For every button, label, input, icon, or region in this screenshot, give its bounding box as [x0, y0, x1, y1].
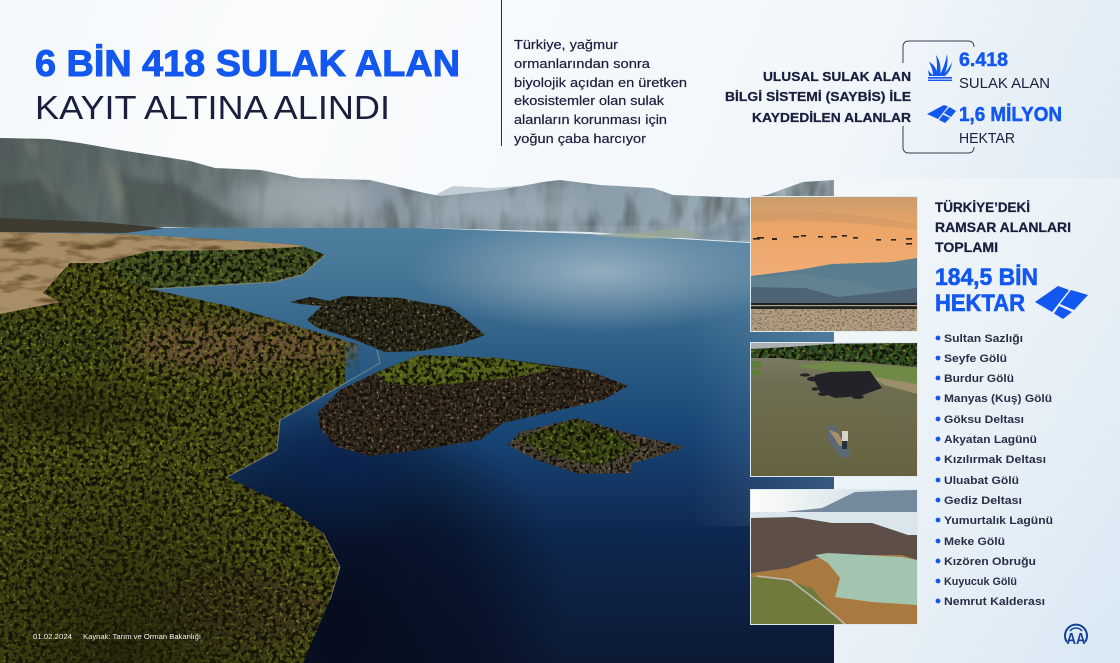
intro text block: ormanlarından sonra	[514, 56, 651, 71]
Ramsar heading: TÜRKİYE’DEKİ	[935, 200, 1030, 215]
mountain range	[0, 138, 834, 242]
stat: 6.418 wetlands	[959, 50, 1050, 92]
dark strip at foot of mountain	[0, 218, 165, 233]
list of Ramsar sites: Kızören Obruğu	[944, 556, 1036, 568]
logo: AA: AA	[1066, 631, 1086, 648]
SAYBIS heading: BİLGİ SİSTEMİ (SAYBİS) İLE	[725, 89, 911, 104]
logo: AA	[1065, 625, 1087, 648]
lake water	[0, 212, 834, 663]
SAYBIS heading: ULUSAL SULAK ALAN	[763, 69, 911, 84]
distant peaks	[437, 186, 545, 198]
intro text block: yoğun çaba harcıyor	[514, 131, 647, 146]
divider line	[501, 0, 502, 146]
list of Ramsar sites: Meke Gölü	[944, 536, 1005, 548]
photo 1 border	[750, 196, 918, 332]
stat: 1.6 million hectares	[959, 103, 1062, 147]
green peninsula	[103, 246, 328, 290]
intro text block	[514, 37, 687, 146]
intro text block: alanların korunması için	[514, 112, 667, 127]
list of Ramsar sites: Nemrut Kalderası	[944, 596, 1045, 608]
SAYBIS heading	[725, 69, 912, 125]
Ramsar heading	[935, 200, 1071, 255]
stat: 184.5 thousand hectares: 184,5 BİN	[935, 264, 1038, 291]
stat: 184.5 thousand hectares	[935, 264, 1038, 317]
tan plain	[0, 230, 330, 314]
island 3	[508, 418, 685, 474]
list of Ramsar sites: Akyatan Lagünü	[944, 434, 1037, 446]
photo 3 border	[750, 490, 918, 624]
island 3 tree cover	[518, 419, 640, 466]
Ramsar heading: RAMSAR ALANLARI	[935, 220, 1071, 235]
stat: 184.5 thousand hectares: HEKTAR	[935, 290, 1025, 317]
list of Ramsar sites: Uluabat Gölü	[944, 475, 1019, 487]
intro text block: ekosistemler olan sulak	[514, 93, 665, 108]
date and source: Kaynak: Tarım ve Orman Bakanlığı	[83, 634, 201, 641]
list of Ramsar sites: Kuyucuk Gölü	[944, 576, 1017, 588]
island 2	[318, 355, 628, 456]
date and source	[33, 634, 201, 641]
list of Ramsar sites: Burdur Gölü	[944, 373, 1014, 385]
far shore strip	[590, 228, 700, 239]
list of Ramsar sites: Göksu Deltası	[944, 414, 1024, 426]
list of Ramsar sites: Kızılırmak Deltası	[944, 454, 1046, 466]
stat: 1.6 million hectares: 1,6 MİLYON	[959, 103, 1062, 126]
mountain rock faces and mist	[1, 140, 750, 242]
list of Ramsar sites	[936, 333, 1053, 608]
title: 6 BİN 418 SULAK ALAN	[35, 43, 460, 84]
Ramsar heading: TOPLAMI	[935, 240, 998, 255]
title	[35, 43, 460, 126]
photo: cranes at sunset	[751, 197, 917, 331]
photo: crater lake from above	[751, 490, 917, 624]
list of Ramsar sites: Manyas (Kuş) Gölü	[944, 393, 1052, 405]
island 2 tree cover	[375, 355, 560, 386]
photo: water buffalo and boat	[751, 343, 917, 476]
icon: land parcels large	[1035, 286, 1088, 319]
icon: land parcels small	[927, 105, 956, 123]
intro text block: Türkiye, yağmur	[514, 37, 619, 52]
list of Ramsar sites: Sultan Sazlığı	[944, 333, 1023, 345]
SAYBIS heading: KAYDEDİLEN ALANLAR	[752, 110, 912, 125]
list of Ramsar sites: Gediz Deltası	[944, 495, 1022, 507]
right panel background	[834, 178, 1120, 663]
island 1	[290, 296, 485, 352]
list of Ramsar sites: Seyfe Gölü	[944, 353, 1007, 365]
stat: 1.6 million hectares: HEKTAR	[959, 130, 1015, 147]
stat: 6.418 wetlands: SULAK ALAN	[959, 75, 1050, 92]
title: KAYIT ALTINA ALINDI	[35, 89, 390, 126]
main lake landscape photograph	[0, 138, 834, 663]
date and source: 01.02.2024	[33, 634, 72, 641]
stat: 6.418 wetlands: 6.418	[959, 50, 1008, 71]
pale shoreline strip	[150, 255, 380, 600]
intro text block: biyolojik açıdan en üretken	[514, 75, 687, 90]
list of Ramsar sites: Yumurtalık Lagünü	[944, 515, 1053, 527]
icon: wetland reeds	[928, 54, 952, 81]
photo 2 border	[750, 342, 918, 476]
bracket frame	[903, 41, 974, 153]
mainland shore	[0, 225, 360, 663]
